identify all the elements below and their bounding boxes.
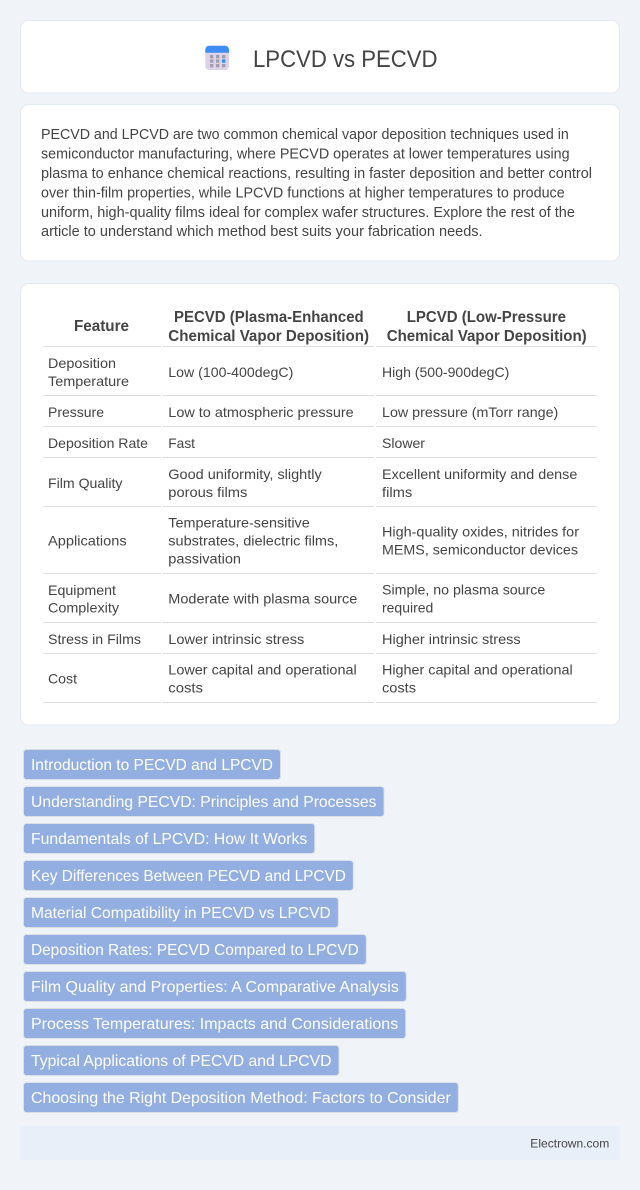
row: film quality: Excellent uniformity and dense [382,466,578,482]
row: deposition rate: Deposition Rate [48,435,148,451]
text block: introduction paragraph: article to understand which method best suits your fabrication needs. [41,224,483,240]
panel: introduction [20,104,620,261]
row: equipment complexity [48,582,546,616]
link: process temperatures: Process Temperatures: Impacts and Considerations [31,1016,398,1033]
row: applications: passivation [168,551,241,567]
row: deposition temperature: Deposition [48,355,116,371]
row: stress in films: Lower intrinsic stress [168,631,304,647]
panel: comparison table [20,284,620,725]
footer [20,1126,620,1160]
row: deposition rate: Slower [382,435,425,451]
table header row: PECVD (Plasma-Enhanced [174,309,364,326]
text block: introduction paragraph: over thin-film properties, while LPCVD functions at higher temperatures to produce [41,186,565,202]
table header row: Chemical Vapor Deposition) [168,328,369,345]
link: typical applications: Typical Applications of PECVD and LPCVD [31,1053,332,1070]
link: introduction: Introduction to PECVD and LPCVD [31,757,273,774]
row: film quality: porous films [168,484,247,500]
row: applications: Applications [48,533,127,549]
row: deposition rate: Fast [168,435,195,451]
link: material compatibility: Material Compatibility in PECVD vs LPCVD [31,905,331,922]
row: stress in films: Higher intrinsic stress [382,631,521,647]
row: pressure: Low to atmospheric pressure [168,404,354,420]
row: cost: Higher capital and operational [382,662,573,678]
row: applications: substrates, dielectric films, [168,533,338,549]
text block: introduction paragraph [41,127,592,240]
row: film quality [48,466,578,500]
link: fundamentals of LPCVD: Fundamentals of LPCVD: How It Works [31,831,307,848]
table header row [74,309,587,345]
row: cost: Cost [48,671,77,687]
link: understanding PECVD [24,786,384,816]
row: cost: Lower capital and operational [168,662,357,678]
link: deposition rates: Deposition Rates: PECVD Compared to LPCVD [31,942,359,959]
row: pressure [48,404,558,420]
row: cost: costs [382,680,416,696]
row: equipment complexity: Complexity [48,600,119,616]
panel: header card [20,20,620,93]
row: deposition temperature: Low (100-400degC) [168,364,293,380]
row: stress in films: Stress in Films [48,631,141,647]
row: deposition temperature [48,355,509,389]
link: understanding PECVD: Understanding PECVD: Principles and Processes [31,794,376,811]
row: equipment complexity: Moderate with plasma source [168,591,358,607]
icon: calendar [205,46,229,70]
link: introduction [24,750,280,780]
row: equipment complexity: Simple, no plasma source [382,582,546,598]
row: applications: MEMS, semiconductor devices [382,542,578,558]
row: pressure: Pressure [48,404,104,420]
link: typical applications [24,1046,339,1076]
text block: introduction paragraph: semiconductor manufacturing, where PECVD operates at lower temperatures using [41,146,570,162]
title: LPCVD vs PECVD [253,46,438,73]
link: film quality: Film Quality and Properties: A Comparative Analysis [31,979,399,996]
row: deposition rate [48,435,425,451]
row: equipment complexity: required [382,600,433,616]
link: material compatibility [24,898,338,928]
row: deposition temperature: High (500-900degC) [382,364,509,380]
row: applications: Temperature-sensitive [168,515,310,531]
row: stress in films [48,631,521,647]
row: equipment complexity: Equipment [48,582,116,598]
table header row: LPCVD (Low-Pressure [407,309,566,326]
row: applications: High-quality oxides, nitrides for [382,524,579,540]
link: film quality [24,972,406,1002]
row: applications [48,515,579,567]
text block: introduction paragraph: PECVD and LPCVD are two common chemical vapor deposition techniques used in [41,127,569,143]
link: fundamentals of LPCVD [24,824,315,854]
row: deposition temperature: Temperature [48,373,129,389]
row: film quality: Film Quality [48,475,122,491]
row: film quality: films [382,484,412,500]
table header row: Chemical Vapor Deposition) [387,328,587,345]
row: film quality: Good uniformity, slightly [168,466,322,482]
link: deposition rates [24,934,366,964]
link: key differences: Key Differences Between PECVD and LPCVD [31,868,346,885]
table header row: Feature [74,318,129,335]
row: cost: costs [168,680,203,696]
text block: introduction paragraph: plasma to enhance chemical reactions, resulting in faster deposition and better control [41,166,592,182]
footer: Electrown.com [530,1136,609,1150]
link: choosing the right method [24,1082,458,1112]
text block: introduction paragraph: uniform, high-quality films ideal for complex wafer structures. Explore the rest of the [41,205,575,221]
row: cost [48,662,573,696]
link: choosing the right method: Choosing the Right Deposition Method: Factors to Consider [31,1090,451,1107]
link: process temperatures [24,1008,406,1038]
link: key differences [24,860,353,890]
panel: table of contents links [24,750,458,1112]
row: pressure: Low pressure (mTorr range) [382,404,558,420]
